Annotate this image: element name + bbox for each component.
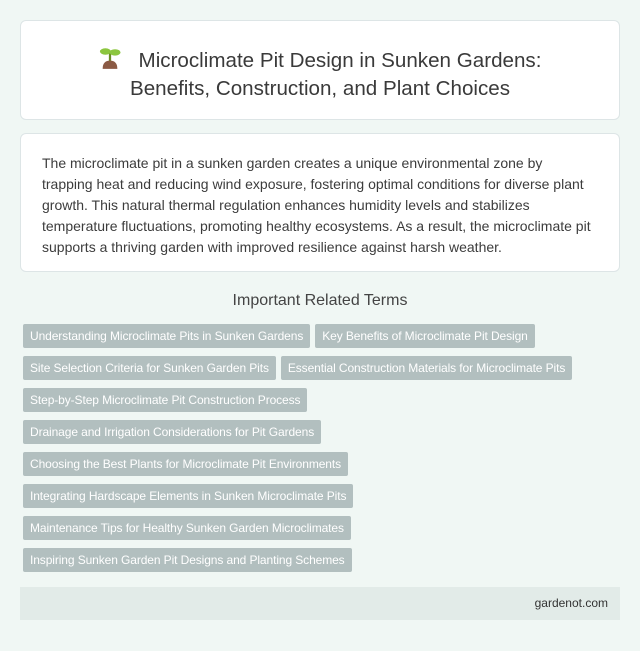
tags list: Understanding Microclimate Pits in Sunken Gardens bbox=[30, 329, 303, 343]
tags list: Maintenance Tips for Healthy Sunken Garden Microclimates bbox=[30, 521, 344, 535]
icon: seedling bbox=[100, 48, 120, 69]
tags list: Step-by-Step Microclimate Pit Construction Process bbox=[30, 393, 300, 407]
tags list: Choosing the Best Plants for Microclimate Pit Environments bbox=[30, 457, 341, 471]
description panel: The microclimate pit in a sunken garden creates a unique environmental zone by trapping heat and reducing wind exposure, fostering optimal conditions for diverse plant growth. This natural thermal regulation enhances humidity levels and stabilizes temperature fluctuations, promoting healthy ecosystems. As a result, the microclimate pit supports a thriving garden with improved resilience against harsh weather. bbox=[42, 155, 591, 255]
title text: Benefits, Construction, and Plant Choices bbox=[130, 77, 510, 100]
tags list bbox=[23, 324, 572, 572]
title text bbox=[100, 48, 541, 100]
tags list: Integrating Hardscape Elements in Sunken Microclimate Pits bbox=[30, 489, 346, 503]
heading: important related terms: Important Related Terms bbox=[233, 292, 407, 309]
tags list: Drainage and Irrigation Considerations for Pit Gardens bbox=[30, 425, 314, 439]
tags list: Site Selection Criteria for Sunken Garden Pits bbox=[30, 361, 269, 375]
footer: gardenot.com bbox=[535, 596, 608, 610]
title text: Microclimate Pit Design in Sunken Gardens: bbox=[139, 49, 541, 72]
footer bbox=[20, 587, 620, 620]
description panel bbox=[20, 133, 620, 272]
tags list: Key Benefits of Microclimate Pit Design bbox=[322, 329, 528, 343]
title card bbox=[20, 20, 620, 120]
tags list: Inspiring Sunken Garden Pit Designs and Planting Schemes bbox=[30, 553, 345, 567]
tags list: Essential Construction Materials for Microclimate Pits bbox=[288, 361, 565, 375]
